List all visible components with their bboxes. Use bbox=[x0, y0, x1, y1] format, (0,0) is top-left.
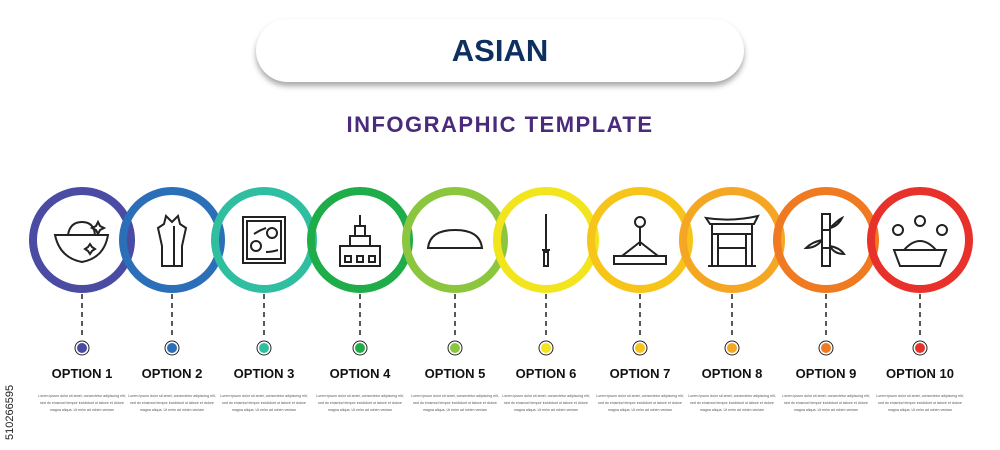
step 5 bbox=[406, 191, 504, 355]
text: OPTION 4 bbox=[330, 366, 390, 381]
step 1 bbox=[33, 191, 131, 355]
text: Lorem ipsum dolor sit amet, consectetur adipiscing elit, sed do eiusmod tempor incididunt ut labore et dolore magna aliqua. Ut enim ad minim veniam bbox=[596, 394, 684, 412]
text: Lorem ipsum dolor sit amet, consectetur adipiscing elit, sed do eiusmod tempor incididunt ut labore et dolore magna aliqua. Ut enim ad minim veniam bbox=[502, 394, 590, 412]
step 7 bbox=[591, 191, 689, 355]
text: OPTION 2 bbox=[142, 366, 202, 381]
text: Lorem ipsum dolor sit amet, consectetur adipiscing elit, sed do eiusmod tempor incididunt ut labore et dolore magna aliqua. Ut enim ad minim veniam bbox=[316, 394, 404, 412]
text: Lorem ipsum dolor sit amet, consectetur adipiscing elit, sed do eiusmod tempor incididunt ut labore et dolore magna aliqua. Ut enim ad minim veniam bbox=[782, 394, 870, 412]
title pill: ASIAN bbox=[452, 33, 548, 68]
text: OPTION 10 bbox=[886, 366, 954, 381]
step 3 bbox=[215, 191, 313, 355]
text: Lorem ipsum dolor sit amet, consectetur adipiscing elit, sed do eiusmod tempor incididunt ut labore et dolore magna aliqua. Ut enim ad minim veniam bbox=[128, 394, 216, 412]
text: OPTION 1 bbox=[52, 366, 112, 381]
text: OPTION 8 bbox=[702, 366, 762, 381]
title pill bbox=[256, 19, 744, 82]
step 2 bbox=[123, 191, 221, 355]
text: Lorem ipsum dolor sit amet, consectetur adipiscing elit, sed do eiusmod tempor incididunt ut labore et dolore magna aliqua. Ut enim ad minim veniam bbox=[876, 394, 964, 412]
text: Lorem ipsum dolor sit amet, consectetur adipiscing elit, sed do eiusmod tempor incididunt ut labore et dolore magna aliqua. Ut enim ad minim veniam bbox=[220, 394, 308, 412]
text: Lorem ipsum dolor sit amet, consectetur adipiscing elit, sed do eiusmod tempor incididunt ut labore et dolore magna aliqua. Ut enim ad minim veniam bbox=[688, 394, 776, 412]
text: Lorem ipsum dolor sit amet, consectetur adipiscing elit, sed do eiusmod tempor incididunt ut labore et dolore magna aliqua. Ut enim ad minim veniam bbox=[38, 394, 126, 412]
subtitle: INFOGRAPHIC TEMPLATE bbox=[346, 112, 654, 137]
side id: 510266595 bbox=[4, 385, 16, 440]
text: OPTION 9 bbox=[796, 366, 856, 381]
step 9 bbox=[777, 191, 875, 355]
text: OPTION 6 bbox=[516, 366, 576, 381]
step 10 bbox=[871, 191, 969, 355]
text: Lorem ipsum dolor sit amet, consectetur adipiscing elit, sed do eiusmod tempor incididunt ut labore et dolore magna aliqua. Ut enim ad minim veniam bbox=[411, 394, 499, 412]
step 8 bbox=[683, 191, 781, 355]
text: OPTION 7 bbox=[610, 366, 670, 381]
text: OPTION 5 bbox=[425, 366, 485, 381]
step 4 bbox=[311, 191, 409, 355]
descriptions bbox=[38, 394, 964, 412]
text: OPTION 3 bbox=[234, 366, 294, 381]
labels bbox=[52, 366, 954, 381]
step 6 bbox=[497, 191, 595, 355]
